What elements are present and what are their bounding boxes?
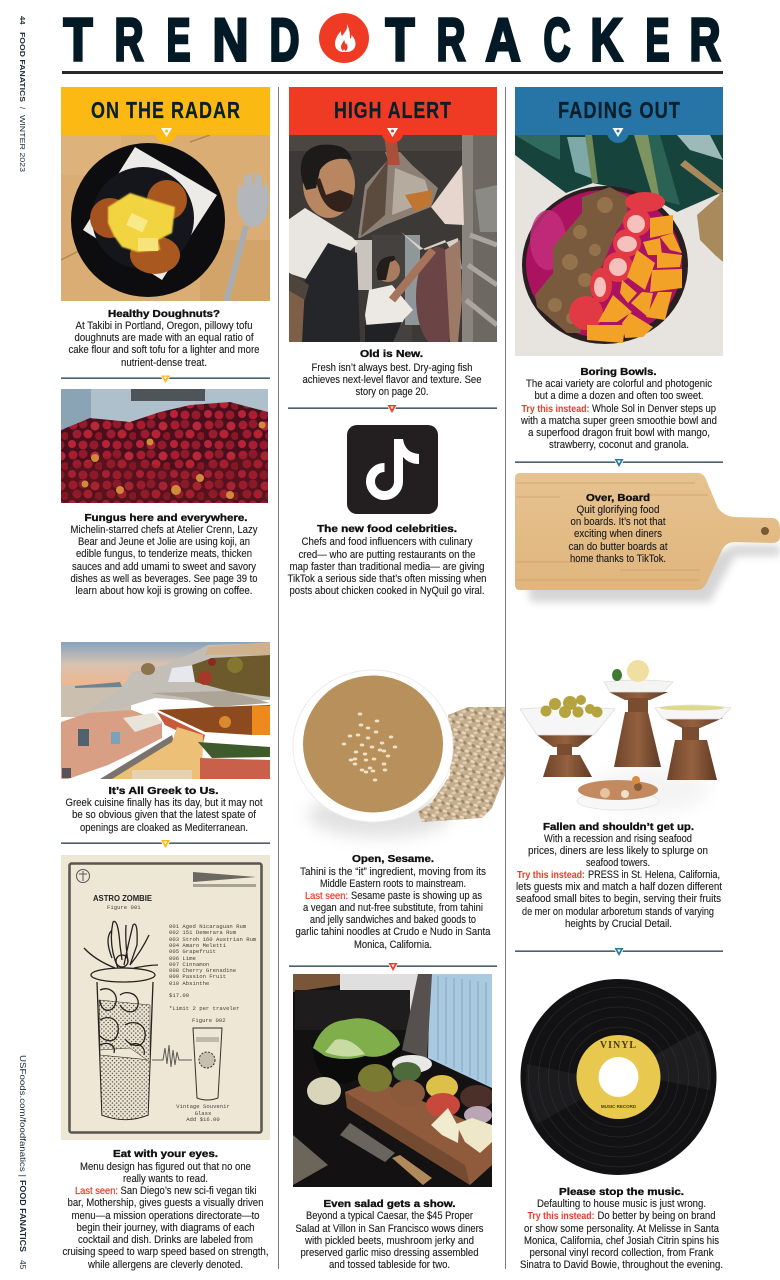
- header: High Alert: HIGH ALERT: [334, 97, 452, 123]
- header: On the Radar: ON THE RADAR: [91, 97, 241, 123]
- text: Please stop the music: Sinatra to David Bowie, throughout the evening.: [520, 1259, 723, 1271]
- side label: folio left bottom: 45: [18, 1260, 28, 1270]
- title: Trend Tracker: C: [544, 6, 570, 74]
- title: Trend Tracker: T: [64, 6, 92, 74]
- record label: [600, 1040, 637, 1109]
- ingredient list: $17.00: [169, 992, 190, 999]
- image: seafood tower stands: [520, 660, 731, 812]
- image: dragon fruit bowl: [515, 135, 723, 356]
- text: Fallen and shouldn't get up: lets guests mix and match a half dozen different: [516, 881, 722, 893]
- text: The new food celebrities: The new food celebrities.: [317, 524, 457, 535]
- image: Santorini terrace: [61, 642, 270, 779]
- text: Fallen and shouldn't get up: PRESS in St. Helena, California,: [588, 869, 720, 881]
- text: Open, Sesame: Monica, California.: [354, 939, 432, 951]
- text: Fungus here and everywhere: Fungus here and everywhere.: [84, 513, 248, 524]
- text: Fungus here and everywhere: sauces and add umami to sweet and savory: [72, 561, 257, 573]
- side label: folio left bottom: [18, 1055, 28, 1270]
- text: Eat with your eyes: cruising speed to warp speed based on strength,: [62, 1246, 269, 1258]
- divider with red marker: [289, 962, 497, 972]
- text: Even salad gets a show: with pickled beets, mushroom jerky and: [304, 1235, 474, 1247]
- tab: header marker blue: [607, 121, 629, 143]
- ingredient list: 003 Stroh 160 Austrian Rum: [169, 936, 257, 943]
- text: The new food celebrities: TikTok a serious side that’s often missing when: [288, 573, 487, 585]
- divider with yellow marker: [61, 839, 270, 849]
- text: Old is New: [302, 349, 482, 398]
- header: High Alert: [289, 87, 497, 137]
- menu heading: ASTRO ZOMBIE: [93, 894, 153, 903]
- tab: header marker red: [382, 121, 404, 143]
- text: Even salad gets a show: [296, 1199, 484, 1271]
- text: The new food celebrities: cred— who are putting restaurants on the: [298, 549, 476, 561]
- ingredient list: 010 Absinthe: [169, 980, 209, 987]
- text: Over, Board: can do butter boards at: [568, 541, 668, 553]
- text: The new food celebrities: Chefs and food influencers with culinary: [302, 536, 473, 548]
- title: Trend Tracker: N: [212, 6, 248, 74]
- header: Fading Out: FADING OUT: [558, 97, 681, 123]
- text: Fallen and shouldn't get up: prices, diners are less likely to splurge on: [528, 845, 708, 857]
- text: Eat with your eyes: Eat with your eyes.: [113, 1149, 218, 1160]
- title: Trend Tracker: R: [436, 6, 466, 74]
- ingredient list: 006 Lime: [169, 955, 196, 962]
- text: Fallen and shouldn't get up: With a recession and rising seafood: [544, 833, 692, 845]
- panel: On the Radar column: [61, 87, 270, 1271]
- text: Healthy Doughnuts: cake flour and soft tofu for a lighter and more: [68, 344, 260, 356]
- text: Even salad gets a show: and tossed tableside for two.: [329, 1259, 450, 1271]
- ingredient list: Figure 002: [192, 1017, 226, 1024]
- title: Trend Tracker: K: [590, 6, 622, 74]
- text: Eat with your eyes: San Diego’s new sci-fi vegan tiki: [120, 1185, 256, 1197]
- side label: folio left top: WINTER 2023: [18, 115, 27, 172]
- header: Fading Out: [515, 87, 723, 137]
- text: Fungus here and everywhere: dishes as well as beverages. See page 39 to: [70, 573, 258, 585]
- text: Old is New: Old is New.: [360, 349, 423, 360]
- drawing: heartbeat line: [152, 1045, 192, 1067]
- text: Boring Bowls: [520, 367, 717, 451]
- divider with blue marker: [515, 947, 723, 957]
- text: Boring Bowls: strawberry, coconut and granola.: [549, 439, 689, 451]
- text: Over, Board: Quit glorifying food: [576, 504, 660, 516]
- text: Fungus here and everywhere: [70, 513, 258, 597]
- text: Old is New: story on page 20.: [356, 386, 428, 398]
- side label: folio left top: 44: [18, 16, 27, 25]
- ingredient list: 005 Grapefruit: [169, 948, 216, 955]
- image: Astro Zombie illustrated menu: Figure 001: [107, 904, 141, 911]
- text: Fallen and shouldn't get up: Try this instead:: [517, 870, 585, 881]
- text: Over, Board: exciting when diners: [574, 528, 662, 540]
- text: Even salad gets a show: Even salad gets a show.: [324, 1199, 456, 1210]
- title: Trend Tracker: A: [486, 6, 520, 74]
- image: vinyl record: [520, 979, 716, 1175]
- text: Fungus here and everywhere: Bear and Jeune et Jolie are using koji, an: [78, 536, 250, 548]
- text: Please stop the music: or show some personality. At Melisse in Santa: [524, 1223, 719, 1235]
- text: Fallen and shouldn't get up: seafood small bites to begin, serving their fruits: [516, 893, 721, 905]
- divider with red marker: [288, 404, 497, 414]
- title: Trend Tracker: T: [386, 6, 414, 74]
- text: Eat with your eyes: begin their journey, with diagrams of each: [76, 1222, 255, 1234]
- text: It's All Greek to Us: be so obvious given that the latest spate of: [72, 809, 256, 821]
- text: The new food celebrities: posts about chicken cooked in NyQuil go viral.: [290, 585, 484, 597]
- text: Boring Bowls: The acai variety are colorful and photogenic: [526, 378, 713, 390]
- tab: header marker yellow: [155, 121, 177, 143]
- title: Trend Tracker: [64, 6, 720, 74]
- drawing: tiki cocktail glass: [84, 921, 158, 1120]
- text: Open, Sesame: and jelly sandwiches and baked goods to: [310, 914, 476, 926]
- text: Fallen and shouldn't get up: heights by Crucial Detail.: [565, 918, 672, 930]
- side label: folio left top: [18, 16, 27, 172]
- text: Boring Bowls: Boring Bowls.: [580, 367, 657, 378]
- record label: MUSIC RECORD: [601, 1104, 637, 1109]
- icon: TikTok logo: [347, 425, 438, 514]
- text: Fallen and shouldn't get up: [516, 822, 722, 930]
- text: Old is New: Fresh isn’t always best. Dry-aging fish: [312, 362, 473, 374]
- text: Boring Bowls: with a matcha super green smoothie bowl and: [520, 415, 717, 427]
- text: Even salad gets a show: preserved garlic miso dressing assembled: [300, 1247, 479, 1259]
- text: Boring Bowls: but a dime a dozen and often too sweet.: [534, 390, 704, 402]
- title: Trend Tracker: R: [690, 6, 720, 74]
- text: The new food celebrities: [288, 524, 487, 597]
- text: Open, Sesame: [296, 854, 491, 951]
- divider with yellow marker: [61, 374, 270, 384]
- text: Open, Sesame: Tahini is the “it” ingredient, moving from its: [300, 866, 486, 878]
- text: Eat with your eyes: cocktail and dish. Drinks are labeled from: [78, 1234, 253, 1246]
- emblem: [76, 870, 90, 882]
- souvenir caption: Glass: [195, 1110, 211, 1117]
- record label: VINYL: [600, 1040, 637, 1051]
- side label: folio left bottom: FOOD FANATICS: [18, 1180, 28, 1252]
- text: Healthy Doughnuts: nutrient-dense treat.: [121, 357, 207, 369]
- image: Astro Zombie illustrated menu: [61, 855, 270, 1140]
- text: Please stop the music: Defaulting to house music is just wrong.: [537, 1198, 706, 1210]
- text: Healthy Doughnuts: [68, 309, 260, 369]
- text: Fungus here and everywhere: edible fungus, to tenderize meats, thicken: [76, 548, 252, 560]
- ingredient list: *Limit 2 per traveler: [169, 1005, 240, 1012]
- ingredient list: [169, 923, 257, 1024]
- text: Please stop the music: [520, 1187, 723, 1271]
- side label: folio left bottom: USFoods.com/foodfanatics |: [18, 1055, 28, 1177]
- text: Healthy Doughnuts: doughnuts are made with an equal ratio of: [74, 332, 254, 344]
- text: Please stop the music: Please stop the music.: [559, 1187, 684, 1198]
- text: Please stop the music: personal vinyl record collection, from Frank: [530, 1247, 714, 1259]
- ingredient list: 008 Cherry Grenadine: [169, 967, 236, 974]
- title: Trend Tracker: D: [270, 6, 300, 74]
- text: Healthy Doughnuts: Healthy Doughnuts?: [108, 309, 220, 320]
- text: Open, Sesame: Last seen:: [305, 891, 348, 902]
- text: Boring Bowls: a superfood dragon fruit bowl with mango,: [528, 427, 710, 439]
- text: It's All Greek to Us: [66, 786, 263, 834]
- text: Eat with your eyes: while allergens are cleverly denoted.: [87, 1259, 243, 1271]
- text: Over, Board: [568, 493, 668, 565]
- text: Over, Board: home thanks to TikTok.: [570, 553, 666, 565]
- souvenir caption: Add $16.00: [186, 1116, 220, 1123]
- text: Eat with your eyes: really wants to read.: [123, 1173, 208, 1185]
- title: Trend Tracker: E: [646, 6, 670, 74]
- text: Fallen and shouldn't get up: Fallen and shouldn’t get up.: [543, 822, 694, 833]
- ingredient list: 009 Passion Fruit: [169, 973, 226, 980]
- ingredient list: 001 Aged Nicaraguan Rum: [169, 923, 247, 930]
- text: Open, Sesame: a vegan and nut-free substitute, from tahini: [303, 902, 483, 914]
- text: Please stop the music: Try this instead:: [528, 1211, 594, 1222]
- drawing: souvenir glass: [193, 1028, 222, 1100]
- text: Please stop the music: Do better by being on brand: [598, 1210, 716, 1222]
- text: Open, Sesame: Open, Sesame.: [352, 854, 434, 865]
- text: It's All Greek to Us: Greek cuisine finally has its day, but it may not: [66, 797, 263, 809]
- text: Fungus here and everywhere: learn about how koji is growing on coffee.: [76, 585, 252, 597]
- image: tahini bowl with sesame seeds: [293, 670, 505, 837]
- text: Even salad gets a show: Beyond a typical Caesar, the $45 Proper: [306, 1210, 473, 1222]
- title: Trend Tracker: E: [166, 6, 190, 74]
- text: The new food celebrities: map faster than traditional media— are giving: [290, 561, 485, 573]
- header: On the Radar: [61, 87, 270, 137]
- text: Over, Board: Over, Board: [586, 493, 650, 504]
- image: koji coffee cherries: [61, 389, 268, 503]
- title: Trend Tracker: R: [114, 6, 144, 74]
- text: Fallen and shouldn't get up: de mer on modular arboretum stands of varying: [522, 906, 714, 918]
- panel: High Alert column: [288, 87, 505, 1271]
- souvenir caption: [176, 1103, 230, 1123]
- text: Even salad gets a show: Salad at Villon in San Francisco wows diners: [296, 1223, 484, 1235]
- image: tofu doughnuts on black plate: [61, 135, 270, 302]
- text: It's All Greek to Us: openings are cloaked as Mediterranean.: [80, 822, 248, 834]
- text: Boring Bowls: Whole Sol in Denver steps up: [592, 403, 716, 415]
- text: Fallen and shouldn't get up: seafood towers.: [586, 857, 650, 869]
- text: Eat with your eyes: Last seen:: [75, 1186, 118, 1197]
- text: It's All Greek to Us: It’s All Greek to Us.: [108, 786, 219, 797]
- text: Eat with your eyes: Menu design has figured out that no one: [80, 1161, 251, 1173]
- souvenir caption: Vintage Souvenir: [176, 1103, 230, 1110]
- ingredient list: 007 Cinnamon: [169, 961, 209, 968]
- text: Please stop the music: Monica, California, chef Josiah Citrin spins his: [524, 1235, 719, 1247]
- text: Eat with your eyes: bar, Mothership, gives guests a visually driven: [68, 1197, 264, 1209]
- text: Healthy Doughnuts: At Takibi in Portland, Oregon, pillowy tofu: [76, 320, 253, 332]
- panel: Fading Out column: [515, 87, 780, 1271]
- image: Caesar salad board: [293, 974, 494, 1187]
- icon: flame in red circle: [319, 13, 369, 63]
- strength chart: [193, 872, 256, 887]
- image: chefs with dry-aged fish: [288, 135, 497, 347]
- ingredient list: 002 151 Demerara Rum: [169, 929, 237, 936]
- text: Old is New: achieves next-level flavor and texture. See: [302, 374, 482, 386]
- text: Open, Sesame: garlic tahini noodles at Crudo e Nudo in Santa: [296, 926, 491, 938]
- text: Eat with your eyes: [62, 1149, 269, 1271]
- text: Fungus here and everywhere: Michelin-starred chefs at Atelier Crenn, Lazy: [70, 524, 258, 536]
- ingredient list: 004 Amaro Meletti: [169, 942, 227, 949]
- text: Eat with your eyes: menu—a mission operations directorate—to: [72, 1210, 260, 1222]
- text: Over, Board: on boards. It’s not that: [570, 516, 666, 528]
- text: Boring Bowls: Try this instead:: [522, 404, 590, 415]
- divider with blue marker: [515, 458, 723, 468]
- text: Open, Sesame: Sesame paste is showing up as: [351, 890, 482, 902]
- side label: folio left top: /: [18, 107, 27, 110]
- text: Open, Sesame: Middle Eastern roots to mainstream.: [320, 878, 466, 890]
- side label: folio left top: FOOD FANATICS: [18, 32, 27, 102]
- image: wooden cutting board: [515, 473, 780, 602]
